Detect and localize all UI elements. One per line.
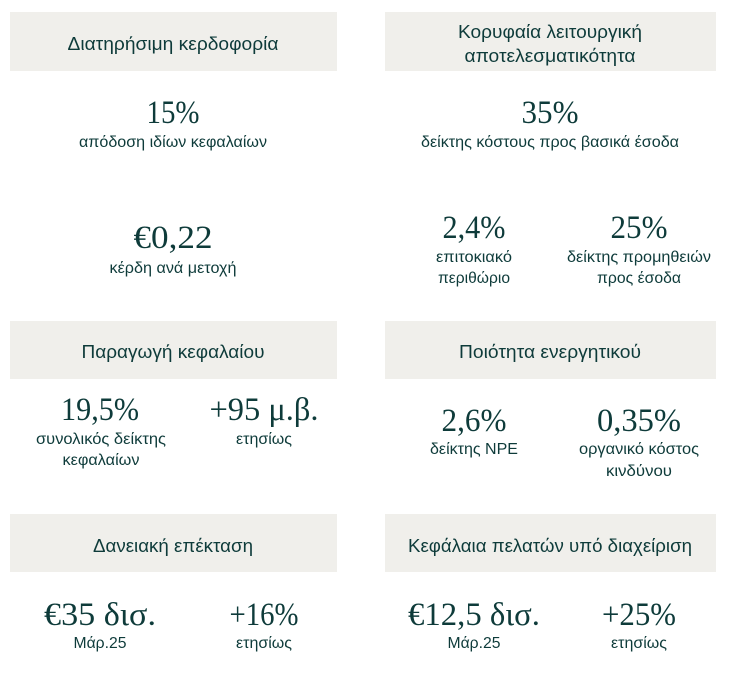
metric: organic cost of risk: οργανικό κόστος [579, 441, 699, 458]
metric: fees to income: δείκτης προμηθειών [567, 249, 711, 266]
heading: capital generation: Παραγωγή κεφαλαίου [82, 342, 264, 362]
metric: basis points year on year: ετησίως [236, 431, 292, 448]
metric: NPE ratio: δείκτης NPE [430, 441, 518, 458]
metric: earnings per share [110, 220, 236, 277]
metric: assets under management [408, 597, 540, 652]
heading: client assets under management [385, 514, 716, 572]
metric: basis points year on year: +95 μ.β. [210, 392, 318, 428]
metric: return on equity: 15% [146, 95, 200, 131]
metric: cost to core income: 35% [522, 95, 578, 131]
metric: net interest margin: περιθώριο [438, 270, 510, 287]
metric: net interest margin: 2,4% [442, 210, 506, 246]
heading: operating efficiency [385, 12, 716, 71]
metric: assets under management: €12,5 δισ. [408, 597, 540, 633]
panel: loan expansion [10, 514, 337, 652]
heading: client assets under management: Κεφάλαια πελατών υπό διαχείριση [408, 536, 692, 556]
metric: organic cost of risk [579, 403, 699, 480]
metric: total capital ratio: 19,5% [61, 392, 139, 428]
metric: earnings per share: €0,22 [134, 220, 212, 256]
heading: loan expansion [10, 514, 337, 572]
metric: cost to core income: δείκτης κόστους προς βασικά έσοδα [421, 134, 679, 151]
metric: assets growth [602, 597, 676, 652]
metric: loans: €35 δισ. [44, 597, 156, 633]
metric: loan growth: ετησίως [236, 635, 292, 652]
heading: sustainable profitability: Διατηρήσιμη κερδοφορία [68, 34, 278, 54]
metric: total capital ratio [36, 392, 166, 469]
panel: capital generation [10, 321, 337, 469]
metric: assets growth: ετησίως [611, 635, 667, 652]
metric: assets growth: +25% [602, 597, 676, 633]
panel: client assets under management [385, 514, 716, 652]
panel: asset quality [385, 321, 716, 480]
metric: basis points year on year [210, 392, 318, 448]
metric: return on equity: απόδοση ιδίων κεφαλαίων [79, 134, 267, 151]
metric: return on equity [79, 95, 267, 151]
metric: assets under management: Μάρ.25 [448, 635, 500, 652]
metric: net interest margin [436, 210, 512, 287]
panel: sustainable profitability [10, 12, 337, 277]
metric: loans: Μάρ.25 [74, 635, 126, 652]
metric: loan growth: +16% [230, 597, 298, 633]
metric: fees to income: προς έσοδα [597, 270, 681, 287]
metric: NPE ratio: 2,6% [442, 403, 506, 439]
metric: earnings per share: κέρδη ανά μετοχή [110, 260, 236, 277]
metric: organic cost of risk: 0,35% [597, 403, 681, 439]
metric: net interest margin: επιτοκιακό [436, 249, 512, 266]
metric: total capital ratio: συνολικός δείκτης [36, 431, 166, 448]
metric: organic cost of risk: κινδύνου [606, 463, 672, 480]
heading: asset quality: Ποιότητα ενεργητικού [459, 342, 641, 362]
metric: loan growth [230, 597, 298, 652]
metric: cost to core income [421, 95, 679, 151]
heading: asset quality [385, 321, 716, 379]
heading: operating efficiency: Κορυφαία λειτουργική [458, 22, 642, 42]
metric: total capital ratio: κεφαλαίων [62, 452, 140, 469]
heading: capital generation [10, 321, 337, 379]
metric: loans [44, 597, 156, 652]
panel: operating efficiency [385, 12, 716, 287]
metric: fees to income: 25% [610, 210, 668, 246]
heading: operating efficiency: αποτελεσματικότητα [464, 46, 636, 66]
heading: sustainable profitability [10, 12, 337, 71]
metric: fees to income [567, 210, 711, 287]
heading: loan expansion: Δανειακή επέκταση [93, 536, 253, 556]
metric: NPE ratio [430, 403, 518, 458]
